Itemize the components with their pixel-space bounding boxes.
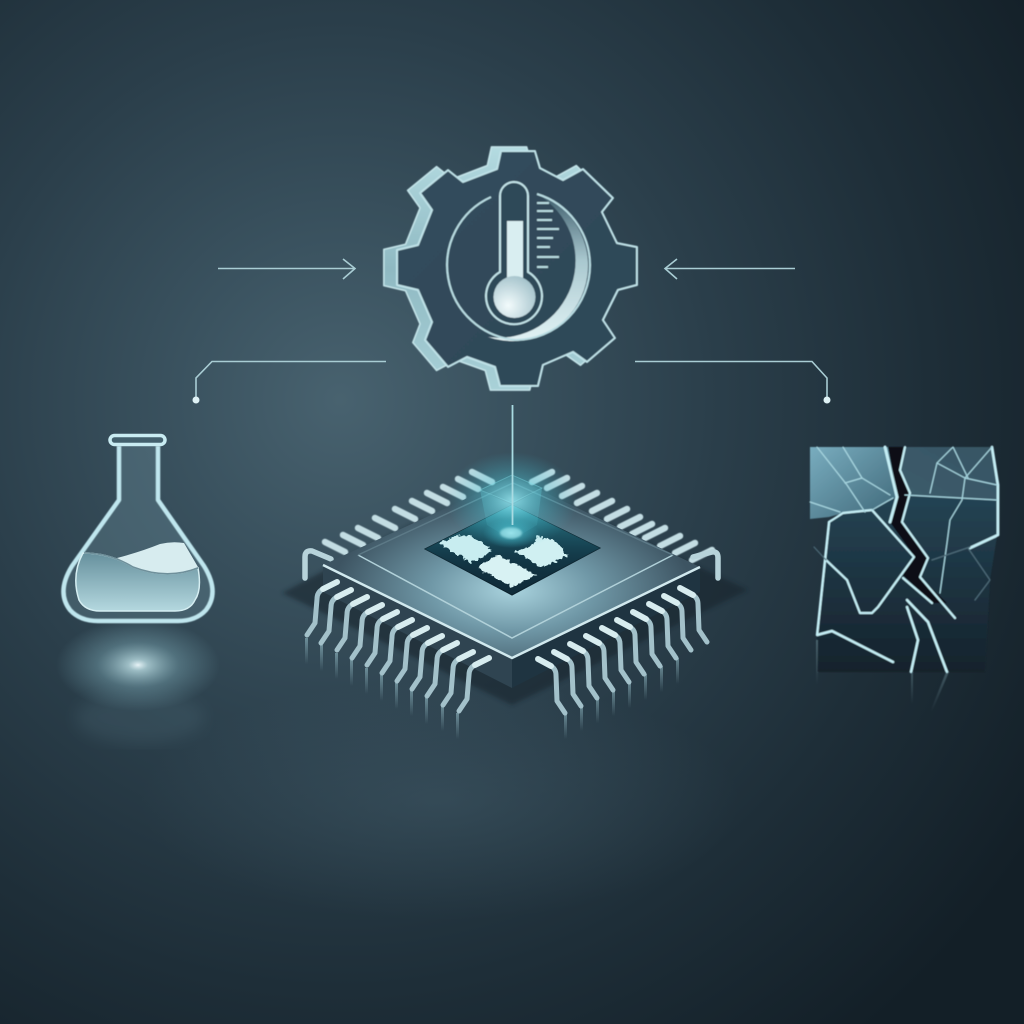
- beam: vertical line from gear to die: [512, 405, 514, 525]
- flask body: [63, 446, 213, 621]
- connector: gear to cracked material: [635, 362, 830, 404]
- crack gap: [888, 447, 947, 603]
- bulb: [494, 276, 536, 318]
- thermometer outline: [486, 182, 542, 324]
- beam impact: [483, 518, 539, 548]
- chip top face: [323, 477, 700, 658]
- die: [425, 505, 600, 595]
- back-right pins: [532, 472, 712, 560]
- shard dark body: [817, 495, 998, 672]
- chip side faces: [323, 566, 512, 688]
- liquid surface line: [84, 553, 198, 574]
- corner pins: [305, 551, 718, 578]
- bright crack lines: [817, 447, 998, 672]
- crack reflections: [816, 640, 949, 712]
- gear face: [397, 151, 637, 386]
- cyan glow: [446, 452, 578, 548]
- chip bevel lines: [323, 483, 700, 658]
- pin reflections: [305, 638, 679, 739]
- icon: gear with thermometer: [384, 147, 637, 390]
- icon: microchip: [282, 452, 748, 739]
- connector: gear to flask: [192, 362, 386, 404]
- gear extruded side: [384, 147, 632, 390]
- thermometer: [486, 182, 559, 324]
- scale ticks: [537, 203, 559, 267]
- back-left pins: [325, 472, 492, 552]
- dial crescent: [488, 194, 588, 341]
- front-right pins: [538, 588, 707, 713]
- shard upper-left panel: [810, 447, 897, 519]
- icon: cracked material: [810, 447, 998, 712]
- die cell: left: [440, 535, 493, 563]
- dim crack lines: [814, 547, 990, 600]
- die teal light: [425, 505, 600, 595]
- flask glow: [56, 619, 220, 711]
- dial ring: [447, 194, 590, 340]
- chip shadow: [282, 520, 748, 705]
- flask lip: [110, 436, 165, 444]
- liquid back surface: [117, 542, 198, 574]
- flask reflection: [75, 692, 205, 744]
- die cell: bottom: [477, 555, 537, 587]
- shard upper-right panel: [900, 447, 997, 500]
- die cell: right: [515, 535, 568, 568]
- glow prism: [480, 475, 542, 540]
- fine crack lines: [810, 447, 997, 593]
- mercury column: [507, 221, 523, 283]
- front-left pins: [307, 582, 489, 711]
- arrow: right into gear: [665, 259, 795, 279]
- liquid: [76, 553, 199, 611]
- arrow: left into gear: [218, 259, 355, 279]
- icon: flask: [56, 436, 220, 744]
